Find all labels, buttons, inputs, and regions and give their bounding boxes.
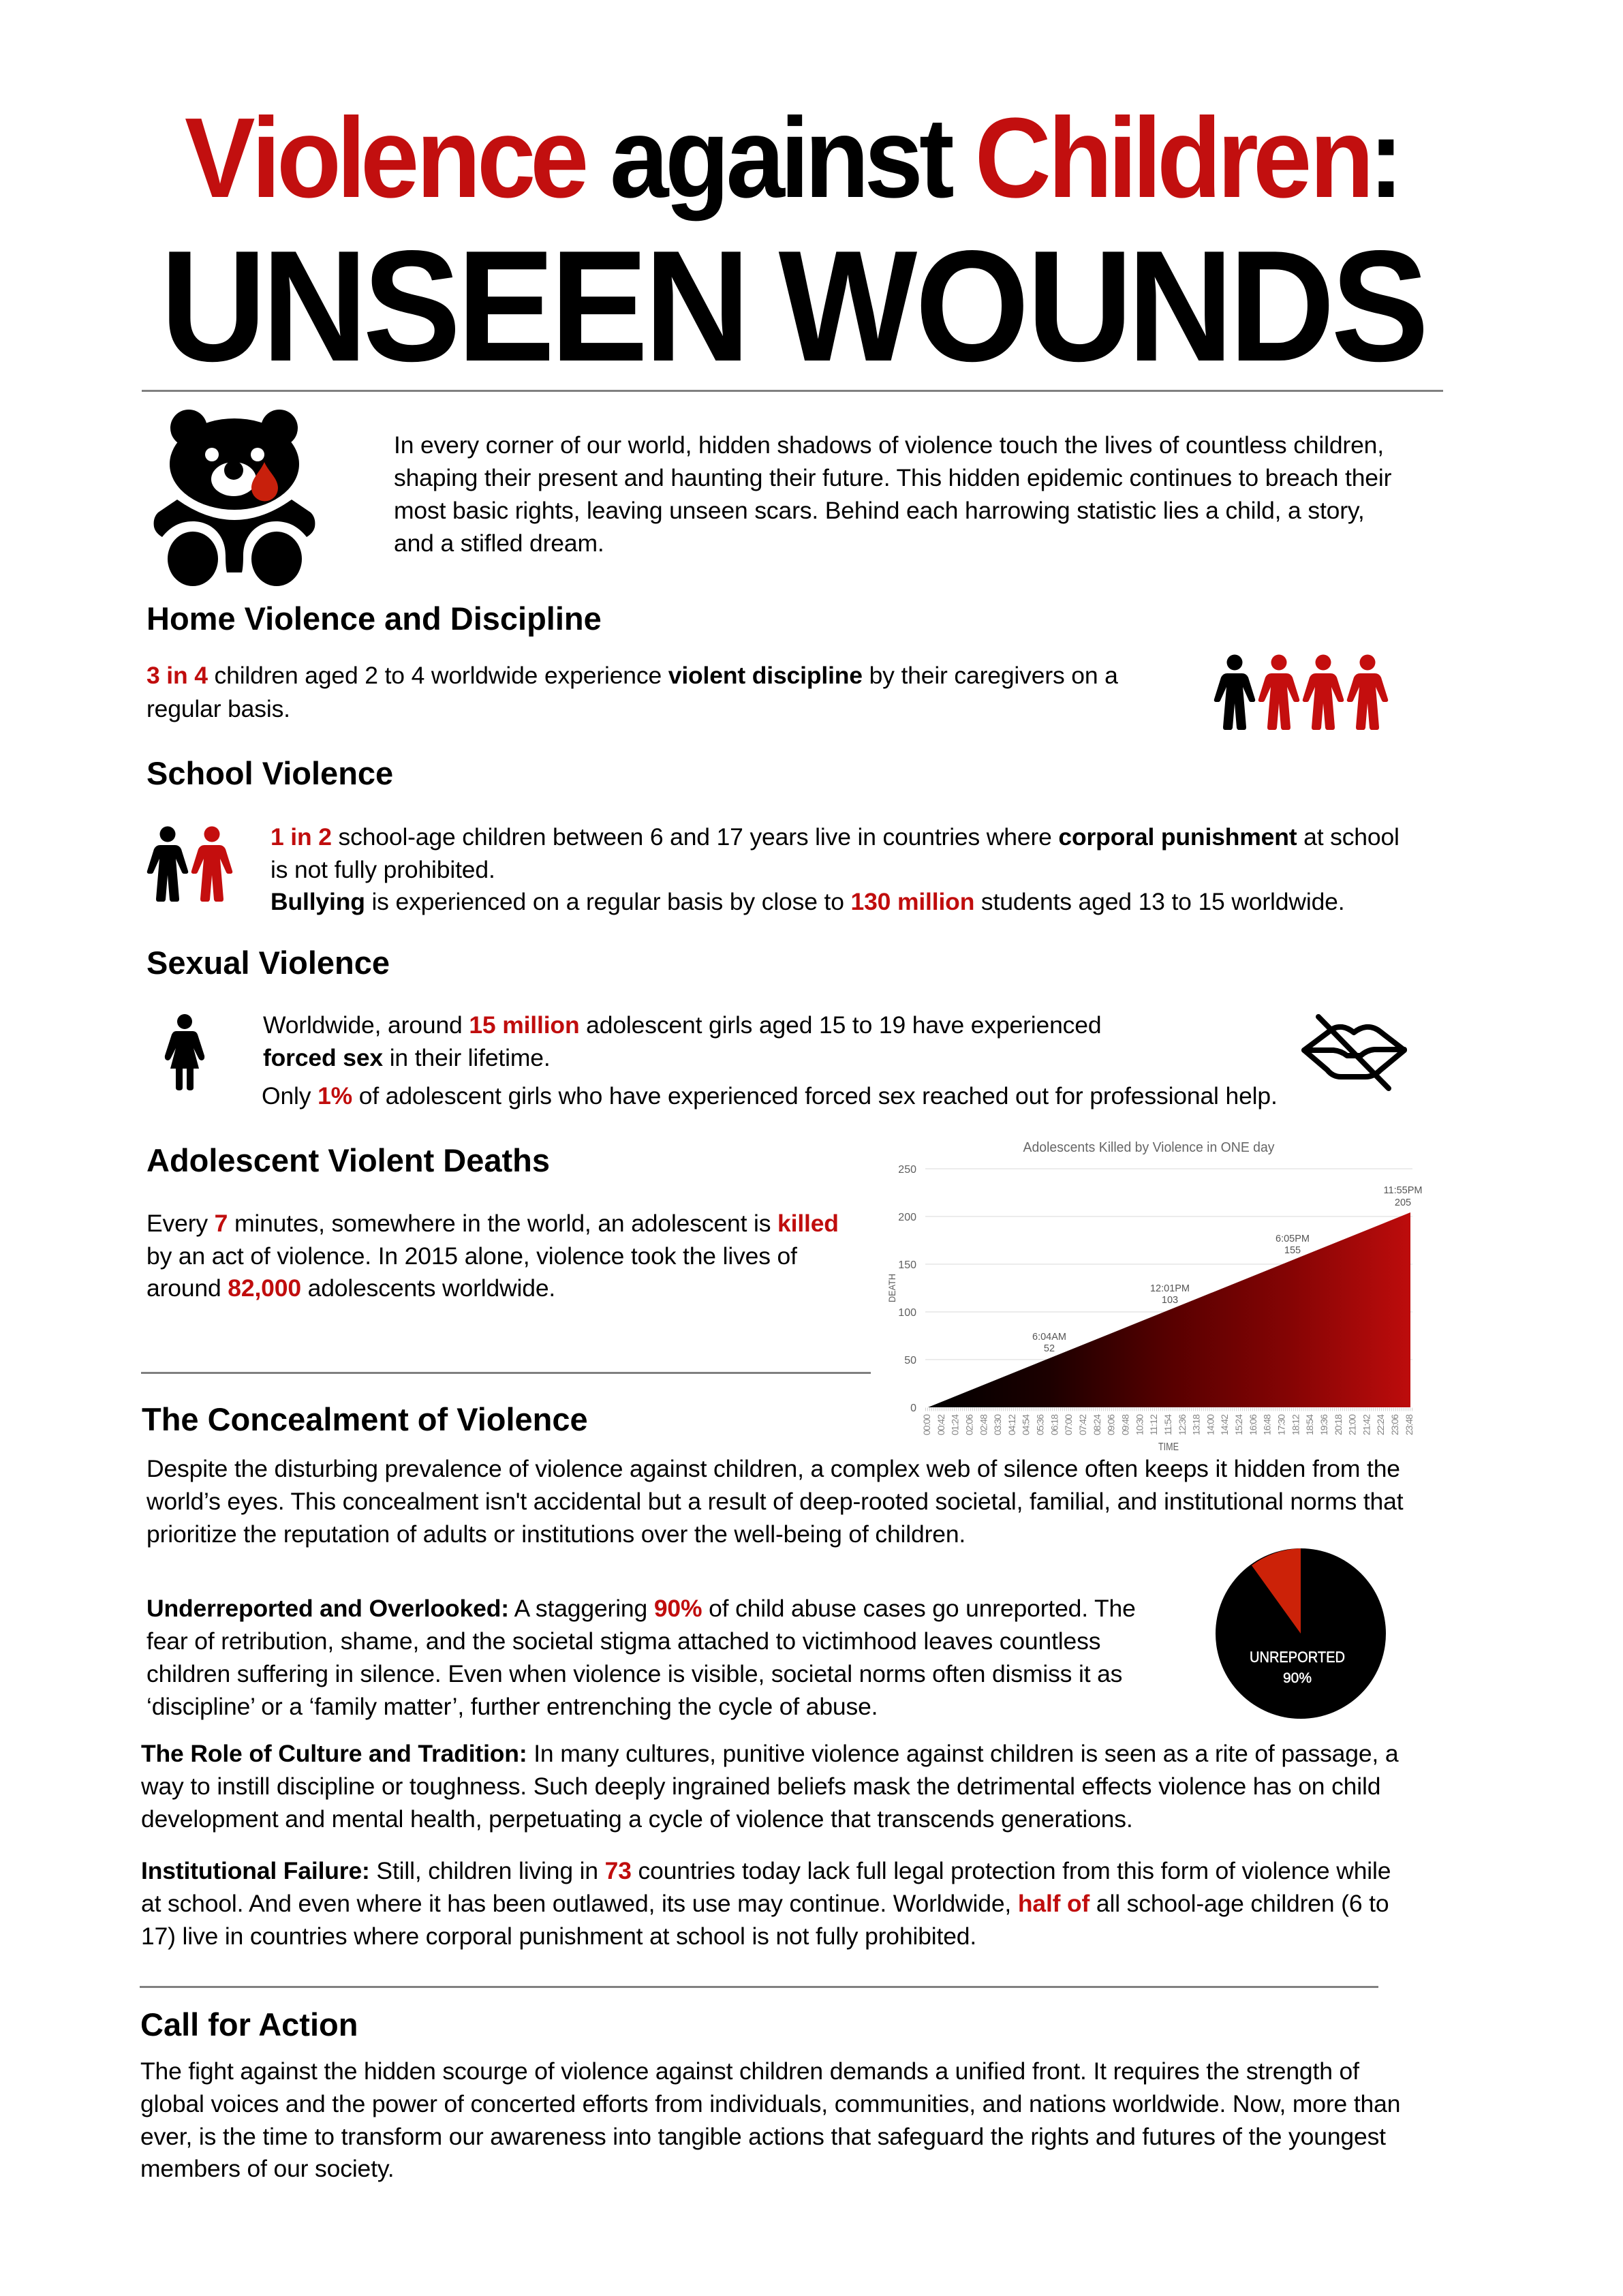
heading: school violence: School Violence	[146, 755, 393, 791]
heading: sexual violence: Sexual Violence	[146, 945, 390, 981]
text: role of culture and tradition: development and mental health, perpetuating a cycle of violence that transcends generations.	[141, 1805, 1133, 1833]
y axis title: DEATH	[886, 1274, 897, 1302]
text: underreported and overlooked	[146, 1595, 1136, 1720]
data annotations: 12:01PM	[1150, 1283, 1190, 1294]
text: concealment intro: world’s eyes. This concealment isn't accidental but a result of deep-rooted societal, familial, and institutional norms that	[146, 1488, 1404, 1515]
text: home violence statistic: regular basis.	[146, 695, 290, 722]
x axis time labels: 09:48	[1120, 1414, 1131, 1435]
text: concealment intro: prioritize the reputation of adults or institutions over the well-being of children.	[146, 1520, 965, 1548]
x axis time labels: 19:36	[1318, 1414, 1329, 1435]
x axis time labels: 10:30	[1134, 1414, 1145, 1435]
text: underreported and overlooked: fear of retribution, shame, and the societal stigma attached to victimhood leaves countless	[146, 1627, 1100, 1655]
intro text: In every corner of our world, hidden shadows of violence touch the lives of countless children,	[394, 431, 1384, 459]
title: Violence against Children:	[185, 95, 1404, 221]
icon: crying teddy bear	[154, 410, 315, 586]
text: concealment intro	[146, 1455, 1404, 1548]
pie label: UNREPORTED	[1250, 1649, 1345, 1666]
x axis time labels: 23:48	[1404, 1414, 1415, 1435]
y axis labels: 200	[898, 1212, 916, 1223]
x axis time labels: 21:42	[1361, 1414, 1372, 1435]
x axis time labels: 11:54	[1162, 1414, 1173, 1435]
text: call for action: members of our society.	[140, 2155, 394, 2182]
y axis labels	[898, 1164, 916, 1414]
heading: home violence: Home Violence and Discipline	[146, 600, 602, 637]
text: call for action: The fight against the hidden scourge of violence against children demands a unified front. It requires the strength of	[140, 2057, 1359, 2085]
data annotations: 11:55PM	[1384, 1185, 1422, 1196]
x axis time labels: 15:24	[1233, 1414, 1244, 1435]
data annotations: 52	[1044, 1343, 1055, 1354]
x axis time labels: 03:30	[992, 1414, 1003, 1435]
text: underreported and overlooked: Underreported and Overlooked: A staggering 90% of child abuse cases go unreported. The	[146, 1595, 1136, 1622]
x axis time labels: 21:00	[1347, 1414, 1358, 1435]
icon: crossed-out lips	[1304, 1017, 1404, 1088]
icon: girl figure	[165, 1014, 204, 1090]
text: role of culture and tradition: The Role of Culture and Tradition: In many cultures, punitive violence against children is seen as a rite of passage, a	[141, 1740, 1399, 1767]
pie chart: 90% unreported	[1216, 1548, 1386, 1719]
x axis time labels: 12:36	[1177, 1414, 1188, 1435]
x axis time labels: 00:42	[936, 1414, 946, 1435]
text: home violence statistic	[146, 662, 1118, 722]
text: institutional failure	[141, 1857, 1391, 1950]
x axis time labels: 04:12	[1006, 1414, 1017, 1435]
text: adolescent deaths statistics	[146, 1210, 839, 1302]
intro text: most basic rights, leaving unseen scars. Behind each harrowing statistic lies a child, a story,	[394, 497, 1365, 524]
text: adolescent deaths statistics: Every 7 minutes, somewhere in the world, an adolescent is killed	[146, 1210, 839, 1237]
x axis time labels: 07:00	[1063, 1414, 1074, 1435]
data annotations: 103	[1162, 1295, 1178, 1306]
x axis time labels: 09:06	[1106, 1414, 1117, 1435]
chart title: Adolescents Killed by Violence in ONE day	[1023, 1140, 1274, 1155]
y axis labels: 100	[898, 1307, 916, 1319]
data annotations	[1032, 1185, 1422, 1354]
text: concealment intro: Despite the disturbing prevalence of violence against children, a complex web of silence often keeps it hidden from the	[146, 1455, 1400, 1482]
intro text: shaping their present and haunting their future. This hidden epidemic continues to breach their	[394, 464, 1392, 491]
x axis time labels: 14:42	[1219, 1414, 1230, 1435]
text: institutional failure: Institutional Failure: Still, children living in 73 countries today lack full legal protection from this form of violence while	[141, 1857, 1391, 1884]
x axis time labels: 01:24	[950, 1414, 961, 1435]
data annotations: 6:05PM	[1276, 1234, 1310, 1244]
text: institutional failure: at school. And even where it has been outlawed, its use may continue. Worldwide, half of all school-age children (6 to	[141, 1890, 1389, 1917]
x axis time labels: 18:54	[1304, 1414, 1315, 1435]
y axis labels: 250	[898, 1164, 916, 1176]
text: school violence statistics: 1 in 2 school-age children between 6 and 17 years live in countries where corporal punishment at school	[270, 823, 1400, 851]
text: call for action: global voices and the power of concerted efforts from individuals, communities, and nations worldwide. Now, more than	[140, 2090, 1400, 2117]
y axis labels: 50	[904, 1355, 916, 1366]
data annotations: 155	[1284, 1245, 1301, 1256]
text: home violence statistic: 3 in 4 children aged 2 to 4 worldwide experience violent discipline by their caregivers on a	[146, 662, 1118, 689]
text: adolescent deaths statistics: by an act of violence. In 2015 alone, violence took the lives of	[146, 1242, 797, 1270]
x axis time labels: 18:12	[1290, 1414, 1301, 1435]
x axis time labels	[921, 1414, 1415, 1435]
x axis time labels: 04:54	[1021, 1414, 1032, 1435]
intro text	[394, 431, 1392, 557]
x axis time labels: 06:18	[1049, 1414, 1060, 1435]
x axis time labels: 08:24	[1092, 1414, 1102, 1435]
text: adolescent deaths statistics: around 82,000 adolescents worldwide.	[146, 1274, 555, 1302]
y axis labels: 0	[910, 1403, 916, 1414]
x axis time labels: 00:00	[921, 1414, 932, 1435]
x axis time labels: 02:48	[978, 1414, 989, 1435]
text: underreported and overlooked: ‘discipline’ or a ‘family matter’, further entrenching the cycle of abuse.	[146, 1693, 878, 1720]
x axis title: TIME	[1158, 1441, 1179, 1453]
pie label: 90%	[1283, 1670, 1312, 1686]
x axis time labels: 16:48	[1262, 1414, 1273, 1435]
heading: the concealment of violence: The Concealment of Violence	[142, 1401, 588, 1437]
heading: call for action: Call for Action	[140, 2006, 358, 2042]
text: school violence statistics: Bullying is experienced on a regular basis by close to 130 million students aged 13 to 15 worldwide.	[270, 888, 1344, 915]
icon: two children, one red	[147, 826, 232, 902]
x axis time labels: 14:00	[1205, 1414, 1216, 1435]
y axis labels: 150	[898, 1259, 916, 1271]
x axis time labels: 05:36	[1035, 1414, 1046, 1435]
x axis time labels: 07:42	[1077, 1414, 1088, 1435]
x axis time labels: 16:06	[1248, 1414, 1258, 1435]
text: school violence statistics: is not fully prohibited.	[270, 856, 495, 883]
x axis time labels: 02:06	[963, 1414, 974, 1435]
text: role of culture and tradition: way to instill discipline or toughness. Such deeply ingrained beliefs mask the detrimental effects violence has on child	[140, 1773, 1380, 1800]
area: cumulative deaths gradient triangle	[928, 1212, 1410, 1407]
x axis time labels: 22:24	[1375, 1414, 1386, 1435]
text: underreported and overlooked: children suffering in silence. Even when violence is visible, societal norms often dismiss it as	[146, 1660, 1122, 1687]
icon: four children, three red	[1214, 654, 1388, 730]
text: institutional failure: 17) live in countries where corporal punishment at school is not fully prohibited.	[141, 1923, 976, 1950]
title	[160, 95, 1429, 395]
text: school violence statistics	[270, 823, 1400, 915]
data annotations: 6:04AM	[1032, 1332, 1066, 1343]
x axis time labels: 13:18	[1191, 1414, 1202, 1435]
text: call for action: ever, is the time to transform our awareness into tangible actions that safeguard the rights and futures of the youngest	[140, 2123, 1386, 2150]
heading: adolescent violent deaths: Adolescent Violent Deaths	[146, 1142, 550, 1178]
title: UNSEEN WOUNDS	[160, 218, 1429, 395]
intro text: and a stifled dream.	[394, 530, 604, 557]
text: sexual violence statistics	[262, 1011, 1278, 1109]
text: sexual violence statistics: Only 1% of adolescent girls who have experienced forced sex reached out for professional help.	[262, 1082, 1278, 1109]
chart: adolescents killed by violence in one day	[886, 1140, 1422, 1453]
text: sexual violence statistics: Worldwide, around 15 million adolescent girls aged 15 to 19 have experienced	[263, 1011, 1101, 1039]
text: role of culture and tradition	[140, 1740, 1399, 1833]
data annotations: 205	[1395, 1197, 1411, 1208]
x axis time labels: 23:06	[1389, 1414, 1400, 1435]
x axis time labels: 17:30	[1276, 1414, 1286, 1435]
x axis time labels: 11:12	[1148, 1414, 1159, 1435]
text: sexual violence statistics: forced sex in their lifetime.	[263, 1044, 551, 1071]
x axis time labels: 20:18	[1333, 1414, 1344, 1435]
text: call for action	[140, 2057, 1400, 2182]
pie label	[1250, 1649, 1345, 1686]
